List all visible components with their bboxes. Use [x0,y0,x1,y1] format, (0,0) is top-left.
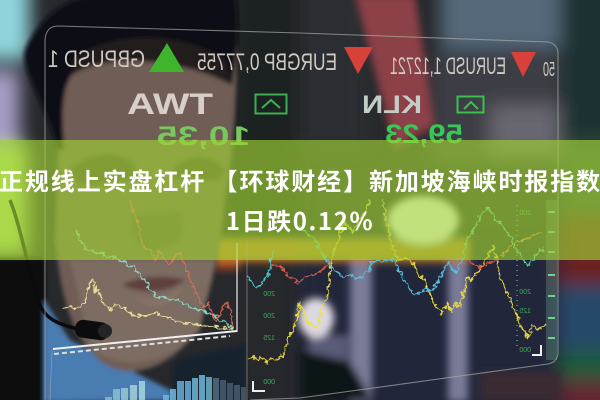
ticker: EURGBP: EURGBP 0,77755 [197,49,337,76]
axis labels: 000 [263,379,275,386]
axis labels: 125 [263,335,275,342]
ticker: EURUSD: EURUSD 1,12721 [390,53,506,80]
axis labels: 200 [519,289,531,296]
axis labels: 200 [263,313,275,320]
ticker: EURGBP [197,47,373,76]
left line chart [53,200,237,354]
axis labels: 200 [519,210,531,217]
ticker: GBPUSD: GBPUSD 1 [48,46,145,73]
title band [0,140,600,260]
axis labels: 125 [519,308,531,315]
stock: KLN: KLN [362,91,422,119]
bar chart [105,375,246,400]
ticker: EURUSD: 50 [543,59,555,81]
glass screen frame [45,26,558,400]
ticker: EURUSD [390,52,555,81]
stock: TWA [127,88,286,151]
axis labels [263,210,531,386]
stock: KLN: 59,23 [385,119,463,149]
stock: KLN [362,91,484,149]
ticker: GBPUSD [48,43,184,73]
icon: headset microphone [10,200,112,341]
stock: TWA: TWA [127,88,213,121]
axis labels: 200 [263,291,275,298]
axis labels: 000 [519,347,531,354]
right line chart [248,200,545,391]
title line 2: 1日跌0.12% [226,202,374,237]
title line 1: 正规线上实盘杠杆 【环球财经】新加坡海峡时报指数 [0,162,600,197]
side scale strip [546,200,557,360]
stock: TWA: 10,35 [157,121,250,151]
